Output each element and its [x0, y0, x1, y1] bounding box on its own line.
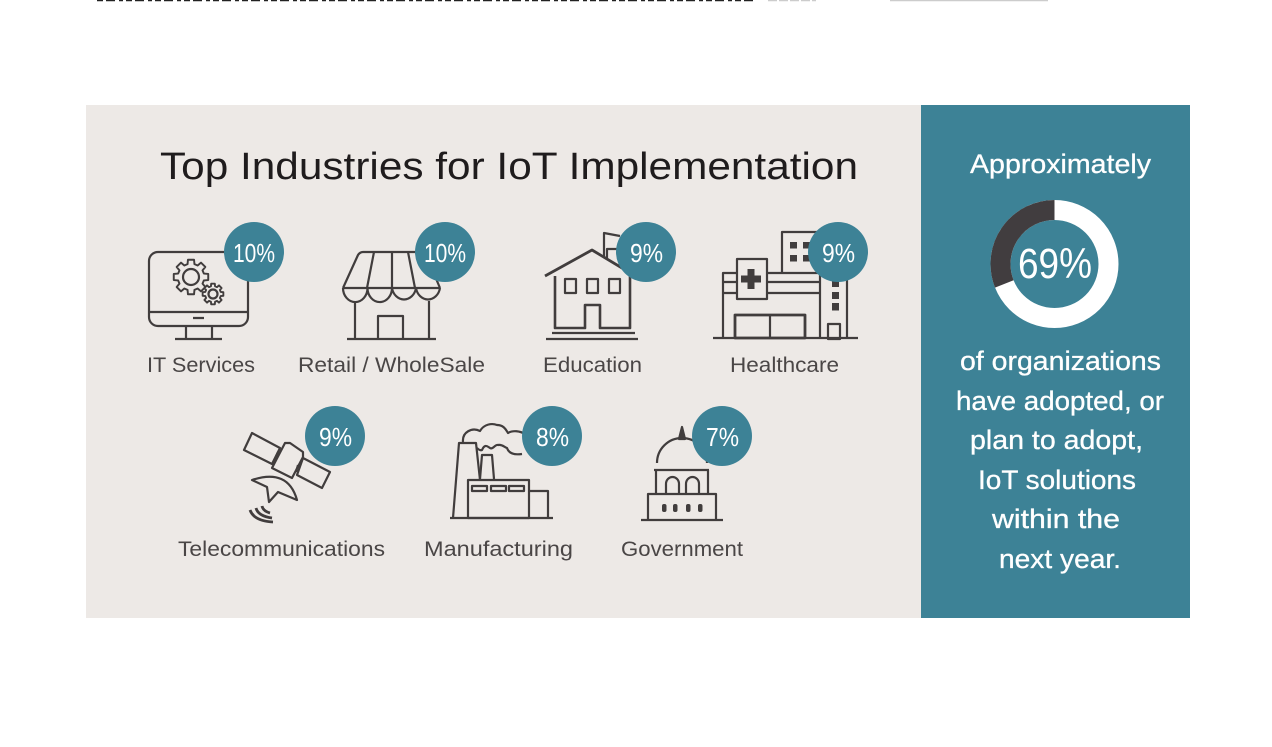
badge: retail 10%	[415, 222, 475, 282]
label: Government: Government	[621, 537, 743, 561]
heading: Approximately: Approximately	[970, 149, 1152, 179]
badge: government 7%	[692, 406, 752, 466]
label: Education: Education	[543, 353, 642, 377]
text block: adoption description: within the	[991, 504, 1120, 534]
badge: telecommunications 9%: 9%	[319, 422, 352, 452]
donut chart: 69%	[1000, 210, 1108, 318]
icon: IT services monitor	[149, 252, 248, 339]
badge: manufacturing 8%: 8%	[536, 422, 569, 452]
donut chart: 69%: 69%	[1018, 240, 1092, 288]
text block: adoption description: plan to adopt,	[970, 425, 1143, 455]
label: IT Services: IT Services	[147, 353, 255, 377]
title: Top Industries for IoT Implementation	[160, 146, 858, 188]
icon: healthcare hospital	[713, 232, 858, 339]
badge: education 9%	[616, 222, 676, 282]
label: Retail / WholeSale: Retail / WholeSale	[298, 353, 485, 377]
icon: retail storefront	[343, 252, 440, 339]
text block: adoption description: have adopted, or	[956, 386, 1164, 416]
label: Healthcare: Healthcare	[730, 353, 839, 377]
panel: top industries	[86, 105, 921, 618]
badge: healthcare 9%	[808, 222, 868, 282]
badge: manufacturing 8%	[522, 406, 582, 466]
icon: government capitol	[641, 427, 723, 520]
text block: adoption description: of organizations	[960, 346, 1161, 376]
badge: IT services 10%: 10%	[233, 238, 275, 268]
badge: healthcare 9%: 9%	[822, 238, 855, 268]
badge: telecommunications 9%	[305, 406, 365, 466]
badge: retail 10%: 10%	[424, 238, 466, 268]
label: Manufacturing: Manufacturing	[424, 537, 573, 561]
text block: adoption description: next year.	[999, 544, 1121, 574]
icon: education school	[545, 233, 638, 339]
label: Telecommunications: Telecommunications	[178, 537, 385, 561]
icon: manufacturing factory	[450, 424, 553, 518]
text block: adoption description: IoT solutions	[978, 465, 1136, 495]
icon: telecommunications satellite	[244, 433, 330, 522]
badge: government 7%: 7%	[706, 422, 739, 452]
badge: education 9%: 9%	[630, 238, 663, 268]
panel: adoption statistic	[921, 105, 1190, 618]
badge: IT services 10%	[224, 222, 284, 282]
text block: adoption description	[956, 346, 1164, 574]
